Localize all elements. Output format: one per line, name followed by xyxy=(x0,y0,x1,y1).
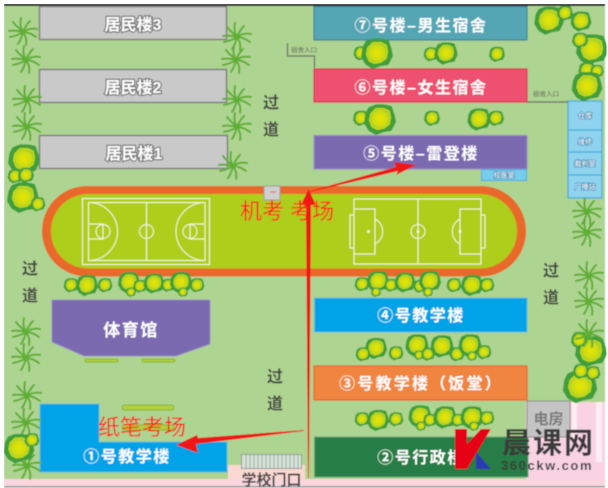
red arrow: main route from gate to computer exam hall xyxy=(301,189,316,478)
building 6: female dormitory: ⑥号楼–女生宿舍 xyxy=(355,78,487,97)
building 4: teaching building: ④号教学楼 xyxy=(377,306,465,325)
right side small buildings: 仓库 xyxy=(578,111,592,120)
football pitch xyxy=(350,199,485,264)
walkway labels: 道 xyxy=(543,288,559,307)
watermark logo: 360ckw.com xyxy=(501,458,593,473)
walkway labels: 道 xyxy=(263,120,279,139)
watermark logo xyxy=(455,427,595,473)
watermark logo: 晨课网 xyxy=(502,427,595,460)
dormitory entrance labels and paths xyxy=(288,43,568,102)
clinic: 校医室 xyxy=(494,170,514,180)
building 1: teaching building xyxy=(40,404,227,472)
dormitory entrance labels and paths: 宿舍入口 xyxy=(291,45,317,54)
power room: 电房 xyxy=(533,410,564,428)
building: residential 1: 居民楼1 xyxy=(106,145,163,163)
walkway labels: 过 xyxy=(267,368,283,386)
building 3: teaching building and canteen: ③号教学楼（饭堂） xyxy=(339,374,503,393)
building 7: male dormitory: ⑦号楼–男生宿舍 xyxy=(355,16,487,35)
building 5: Leideng building xyxy=(314,136,527,169)
building 4: teaching building xyxy=(314,298,527,332)
building: residential 3: 居民楼3 xyxy=(105,16,162,34)
red arrow: to building 5 xyxy=(310,162,416,192)
building 2: administration xyxy=(314,437,528,477)
basketball court xyxy=(82,198,210,264)
walkway labels: 道 xyxy=(22,286,38,305)
school gate xyxy=(241,454,302,488)
building 7: male dormitory xyxy=(314,6,527,40)
hedges xyxy=(85,359,175,430)
walkway labels: 过 xyxy=(22,260,38,278)
walkway labels: 过 xyxy=(263,94,279,112)
label: computer exam hall: 机考 考场 xyxy=(240,199,334,224)
right side small buildings: 维修 xyxy=(578,137,592,146)
dormitory entrance labels and paths: 宿舍入口 xyxy=(533,89,559,98)
walkway labels: 过 xyxy=(543,262,559,280)
building 5: Leideng building: ⑤号楼–雷登楼 xyxy=(363,144,479,163)
building 1: teaching building: ①号教学楼 xyxy=(83,447,171,466)
building 6: female dormitory xyxy=(314,69,527,102)
red arrow: to paper exam building xyxy=(176,430,304,453)
power room xyxy=(527,401,570,437)
right side small buildings xyxy=(568,101,602,198)
sports field xyxy=(42,186,526,276)
small sign on track xyxy=(264,186,280,200)
walkway labels: 道 xyxy=(267,394,283,413)
building 2: administration: ②号行政楼 xyxy=(377,449,465,467)
gymnasium: 体育馆 xyxy=(103,320,159,340)
walkway labels xyxy=(22,94,559,413)
building: residential 2: 居民楼2 xyxy=(105,79,162,97)
label: paper exam hall: 纸笔考场 xyxy=(98,415,186,440)
gymnasium xyxy=(52,300,210,356)
right side small buildings: 裁判室 xyxy=(574,159,596,168)
clinic xyxy=(482,170,526,180)
building: residential 2 xyxy=(40,70,226,102)
building: residential 1 xyxy=(40,136,228,168)
building: residential 3 xyxy=(40,6,226,40)
building 3: teaching building and canteen xyxy=(314,366,527,400)
right side small buildings: 广播站 xyxy=(574,182,596,191)
